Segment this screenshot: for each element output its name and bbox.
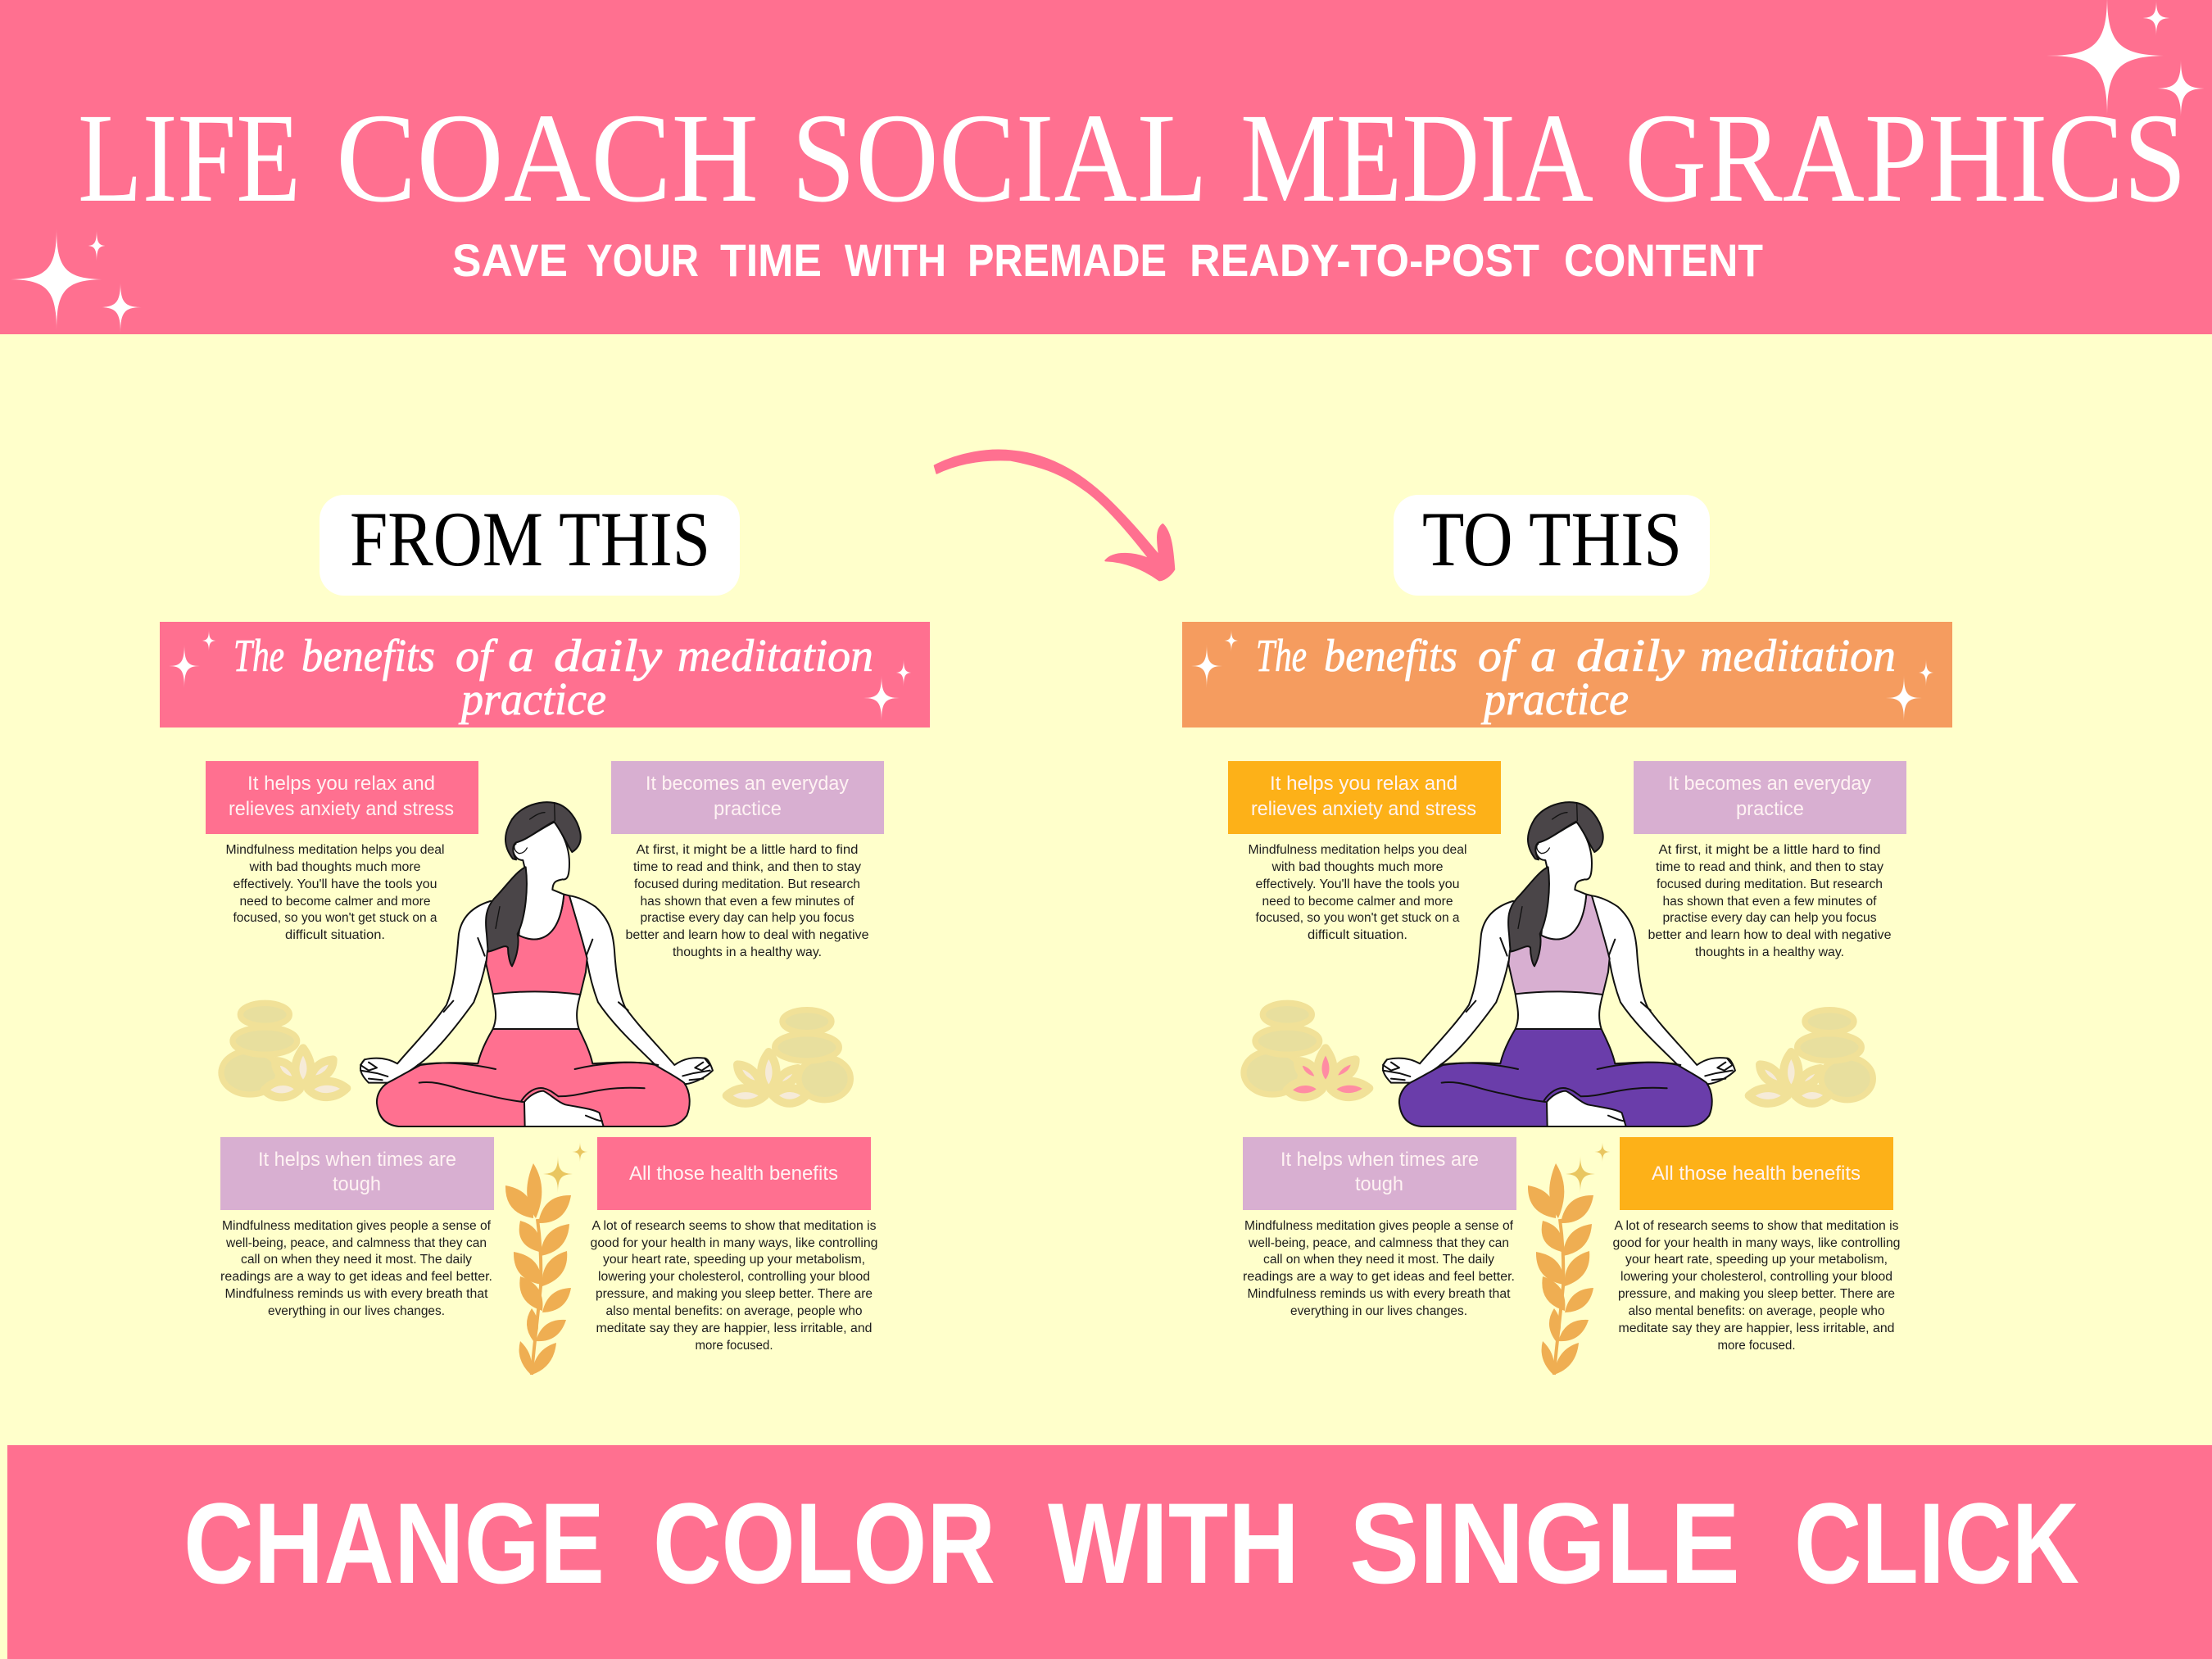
card: tough times: call on when they need it most. The daily	[241, 1253, 472, 1267]
panel title band: daily	[1576, 631, 1684, 682]
card: relax: with bad thoughts much more	[248, 860, 421, 874]
footer text	[184, 1479, 2079, 1607]
card: relax: relieves anxiety and stress	[1251, 798, 1476, 820]
panel title band: The	[233, 631, 284, 682]
card: tough times: readings are a way to get ideas and feel better.	[220, 1270, 492, 1284]
footer text: COLOR	[653, 1479, 995, 1607]
icon: left stones and lotus	[221, 1003, 347, 1097]
card: everyday practice: It becomes an everyday	[1668, 773, 1871, 795]
card: health benefits: All those health benefits	[629, 1163, 838, 1185]
card: everyday practice: At first, it might be a little hard to find	[636, 843, 859, 857]
card: health benefits	[590, 1137, 878, 1353]
card: tough times: readings are a way to get ideas and feel better.	[1243, 1270, 1515, 1284]
card: everyday practice: practise every day can help you focus	[641, 911, 854, 925]
footer text: CLICK	[1794, 1479, 2079, 1607]
card: tough times: tough	[1355, 1173, 1403, 1195]
icon: golden plant	[1528, 1141, 1611, 1375]
card: health benefits: good for your health in many ways, like controlling	[1612, 1236, 1901, 1250]
card: everyday practice: thoughts in a healthy way.	[1695, 945, 1844, 959]
card: everyday practice: focused during meditation. But research	[634, 877, 860, 891]
card: health benefits: pressure, and making you sleep better. There are	[1618, 1287, 1895, 1301]
panel title band: The	[1256, 631, 1307, 682]
panel title band: meditation	[678, 631, 873, 682]
card: relax: difficult situation.	[1308, 928, 1407, 942]
panel title band: daily	[554, 631, 662, 682]
footer text: SINGLE	[1349, 1479, 1740, 1607]
card: everyday practice: better and learn how to deal with negative	[626, 928, 868, 942]
card: relax: Mindfulness meditation helps you deal	[1249, 843, 1466, 857]
subtitle	[452, 234, 1763, 286]
card: health benefits: also mental benefits: on average, people who	[1629, 1304, 1884, 1318]
card: tough times	[1243, 1137, 1516, 1318]
card: relax: Mindfulness meditation helps you deal	[226, 843, 444, 857]
card: relax: focused, so you won't get stuck on a	[1255, 911, 1460, 925]
subtitle: CONTENT	[1564, 234, 1763, 286]
icon: right stones and lotus	[1749, 1010, 1873, 1104]
subtitle: YOUR	[587, 234, 699, 286]
title: LIFE	[78, 87, 301, 229]
card: relax: It helps you relax and	[247, 773, 435, 795]
panel: original pink infographic	[160, 622, 930, 1375]
card: health benefits: lowering your cholesterol, controlling your blood	[1620, 1270, 1892, 1284]
panel title band	[1182, 622, 1952, 728]
figure: meditating woman	[360, 802, 713, 1126]
icon: sparkles top right	[2047, 0, 2206, 118]
card: tough times: Mindfulness reminds us with every breath that	[224, 1287, 488, 1301]
card: everyday practice: practise every day can help you focus	[1663, 911, 1877, 925]
title: MEDIA	[1240, 87, 1593, 229]
panel title band: a	[1530, 631, 1557, 682]
card: tough times: everything in our lives changes.	[268, 1304, 445, 1318]
subtitle: PREMADE	[968, 234, 1167, 286]
panel title band: of	[1478, 631, 1521, 682]
card: health benefits: meditate say they are happier, less irritable, and	[1619, 1321, 1894, 1335]
card: everyday practice: better and learn how to deal with negative	[1648, 928, 1891, 942]
label: from this: FROM THIS	[350, 496, 710, 582]
card: tough times: It helps when times are	[1281, 1149, 1479, 1171]
icon: sparkles bottom left	[7, 229, 142, 333]
panel: recoloured orange and purple infographic	[1182, 622, 1952, 1375]
arrow	[935, 451, 1174, 580]
card: everyday practice	[1634, 761, 1906, 959]
card: relax	[206, 761, 478, 942]
card: tough times	[220, 1137, 494, 1318]
footer text: WITH	[1048, 1479, 1299, 1607]
subtitle: TIME	[720, 234, 822, 286]
card: relax: effectively. You'll have the tools you	[233, 877, 437, 891]
panel title band: practice	[1480, 674, 1629, 725]
card: health benefits: A lot of research seems to show that meditation is	[592, 1219, 877, 1233]
card: relax: It helps you relax and	[1270, 773, 1457, 795]
figure: meditating woman in purple	[1383, 802, 1735, 1126]
card: everyday practice: It becomes an everyday	[646, 773, 849, 795]
card: tough times: Mindfulness reminds us with every breath that	[1247, 1287, 1511, 1301]
title: SOCIAL	[791, 87, 1208, 229]
icon: left stones and pink lotus	[1244, 1003, 1369, 1097]
panel title band: a	[508, 631, 534, 682]
card: tough times: tough	[333, 1173, 381, 1195]
card: everyday practice: has shown that even a few minutes of	[641, 895, 854, 909]
panel title band	[160, 622, 930, 728]
card: everyday practice: thoughts in a healthy way.	[673, 945, 822, 959]
card: everyday practice: time to read and think, and then to stay	[633, 860, 861, 874]
card: tough times: well-being, peace, and calmness that they can	[1248, 1236, 1509, 1250]
footer text: CHANGE	[184, 1479, 605, 1607]
title	[78, 87, 2187, 229]
subtitle: READY-TO-POST	[1190, 234, 1539, 286]
card: health benefits	[1612, 1137, 1901, 1353]
card: tough times: everything in our lives changes.	[1290, 1304, 1467, 1318]
card: everyday practice: time to read and think, and then to stay	[1656, 860, 1883, 874]
card: everyday practice	[611, 761, 884, 959]
card: relax: with bad thoughts much more	[1271, 860, 1444, 874]
card: tough times: Mindfulness meditation gives people a sense of	[1244, 1219, 1514, 1233]
panel title band: practice	[458, 674, 606, 725]
card: relax: effectively. You'll have the tools you	[1255, 877, 1460, 891]
card: everyday practice: focused during meditation. But research	[1657, 877, 1883, 891]
card: health benefits: more focused.	[1717, 1339, 1796, 1353]
card: tough times: call on when they need it most. The daily	[1263, 1253, 1494, 1267]
card: health benefits: pressure, and making you sleep better. There are	[596, 1287, 873, 1301]
subtitle: WITH	[845, 234, 946, 286]
card: health benefits: your heart rate, speeding up your metabolism,	[1625, 1253, 1888, 1267]
panel title band: meditation	[1700, 631, 1896, 682]
footer banner	[7, 1445, 2212, 1659]
card: tough times: It helps when times are	[258, 1149, 456, 1171]
label: to this: TO THIS	[1422, 496, 1682, 582]
card: health benefits: All those health benefits	[1652, 1163, 1861, 1185]
card: health benefits: meditate say they are happier, less irritable, and	[596, 1321, 872, 1335]
card: health benefits: A lot of research seems to show that meditation is	[1614, 1219, 1899, 1233]
card: tough times: Mindfulness meditation gives people a sense of	[222, 1219, 492, 1233]
card: health benefits: lowering your cholesterol, controlling your blood	[598, 1270, 870, 1284]
subtitle: SAVE	[452, 234, 568, 286]
title: COACH	[336, 87, 759, 229]
panel title band: benefits	[1324, 631, 1457, 682]
card: everyday practice: practice	[1736, 798, 1804, 820]
icon: right stones and lotus	[727, 1010, 850, 1104]
header banner	[0, 0, 2212, 334]
card: health benefits: more focused.	[695, 1339, 773, 1353]
card: relax: need to become calmer and more	[239, 895, 431, 909]
card: health benefits: your heart rate, speeding up your metabolism,	[603, 1253, 865, 1267]
panel title band: benefits	[301, 631, 435, 682]
card: relax: relieves anxiety and stress	[229, 798, 454, 820]
panel title band: of	[456, 631, 499, 682]
card: relax: difficult situation.	[285, 928, 385, 942]
card: health benefits: good for your health in many ways, like controlling	[590, 1236, 878, 1250]
card: relax: need to become calmer and more	[1262, 895, 1453, 909]
card: everyday practice: practice	[714, 798, 782, 820]
card: tough times: well-being, peace, and calmness that they can	[225, 1236, 487, 1250]
card: everyday practice: At first, it might be a little hard to find	[1658, 843, 1881, 857]
icon: golden plant	[505, 1141, 589, 1375]
card: relax	[1228, 761, 1501, 942]
card: relax: focused, so you won't get stuck on a	[233, 911, 437, 925]
card: health benefits: also mental benefits: on average, people who	[606, 1304, 862, 1318]
card: everyday practice: has shown that even a few minutes of	[1663, 895, 1877, 909]
